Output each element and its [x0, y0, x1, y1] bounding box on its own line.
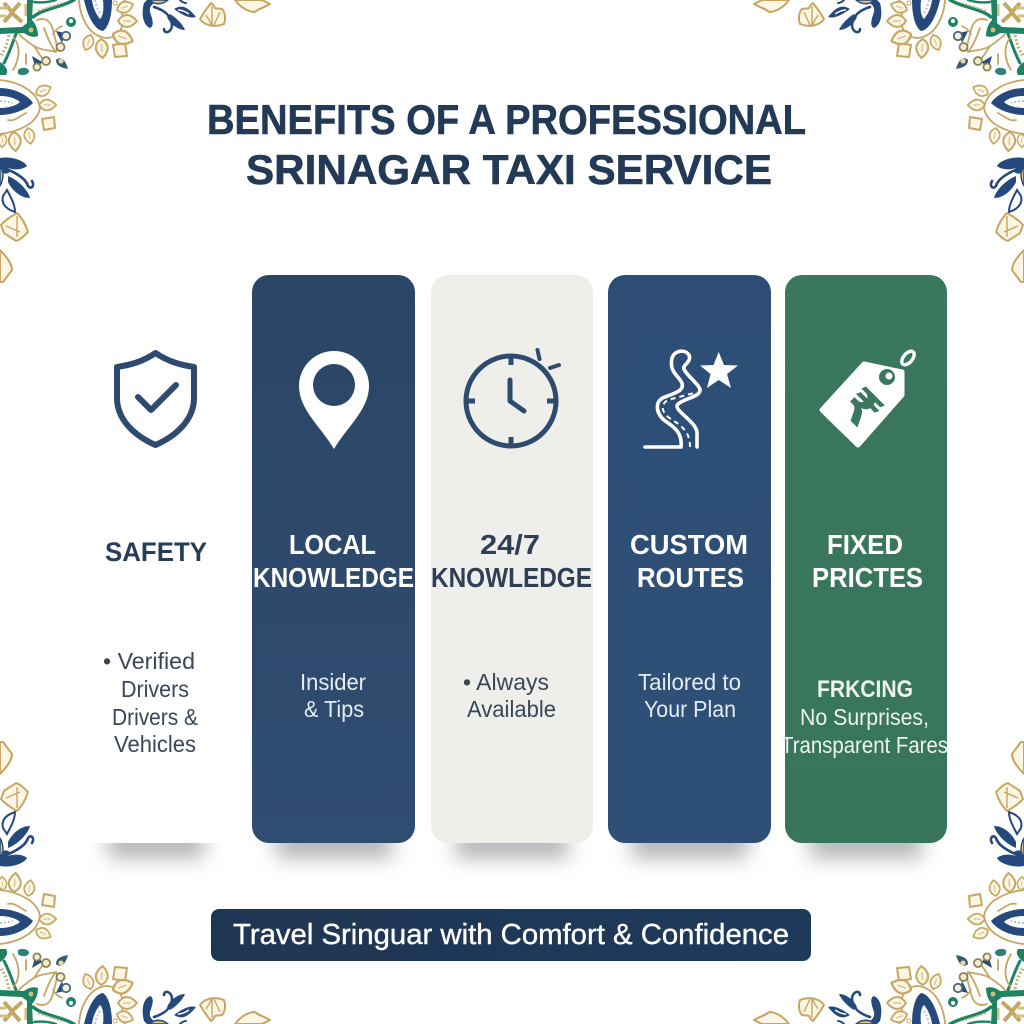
title — [207, 96, 806, 193]
panel: 24/7 knowledge — [431, 275, 593, 843]
text: local knowledge details: & Tips — [304, 696, 364, 722]
text: fixed prices details: FRKCING — [817, 676, 913, 703]
ornament: bottom-right corner — [754, 742, 1024, 1024]
text: custom routes details — [638, 669, 741, 722]
heading: local knowledge: LOCAL — [289, 529, 376, 560]
icon: location pin — [299, 351, 369, 449]
text: 24/7 details: • Always — [463, 669, 549, 695]
card shadows — [108, 830, 922, 858]
ornament: bottom-left corner — [0, 742, 270, 1024]
heading: custom routes: CUSTOM — [630, 529, 748, 560]
text: safety details — [103, 648, 198, 757]
icon: rupee price tag: ₹ — [830, 377, 893, 440]
icon: shield with check — [117, 353, 194, 445]
text: custom routes details: Your Plan — [644, 696, 736, 722]
heading: local knowledge — [253, 529, 414, 593]
text: safety details: Vehicles — [114, 731, 196, 757]
heading: fixed prices: FIXED — [827, 529, 903, 560]
text: safety details: Drivers & — [112, 704, 198, 730]
icon: clock — [466, 350, 559, 446]
text: local knowledge details — [300, 669, 366, 722]
text: safety details: Drivers — [121, 676, 189, 702]
panel: local knowledge — [252, 275, 415, 843]
ornament: top-left corner — [0, 0, 270, 282]
text: fixed prices details: No Surprises, — [800, 704, 929, 730]
heading: 24/7 knowledge — [431, 529, 592, 593]
heading: fixed prices — [812, 529, 923, 593]
title: BENEFITS OF A PROFESSIONAL — [207, 96, 806, 143]
icon: rupee price tag — [822, 349, 917, 445]
ornament: top-right corner — [754, 0, 1024, 282]
heading: 24/7 knowledge: KNOWLEDGE — [431, 562, 592, 593]
text: 24/7 details: Available — [467, 696, 556, 722]
text: local knowledge details: Insider — [300, 669, 366, 695]
panel: safety — [84, 275, 236, 843]
banner: tagline: Travel Sringuar with Comfort & Confidence — [233, 919, 789, 951]
text: custom routes details: Tailored to — [638, 669, 741, 695]
heading: local knowledge: KNOWLEDGE — [253, 562, 414, 593]
heading: 24/7 knowledge: 24/7 — [480, 529, 540, 560]
panel: fixed prices — [781, 275, 948, 843]
text: fixed prices details — [781, 676, 948, 758]
title: SRINAGAR TAXI SERVICE — [246, 146, 772, 193]
text: 24/7 details — [463, 669, 556, 722]
heading: fixed prices: PRICTES — [812, 562, 923, 593]
icon: winding road with star — [645, 351, 738, 447]
banner: tagline — [211, 909, 811, 961]
heading: custom routes — [630, 529, 748, 593]
text: fixed prices details: Transparent Fares — [781, 732, 948, 758]
text: safety details: • Verified — [103, 648, 195, 674]
heading: custom routes: ROUTES — [637, 562, 744, 593]
panel: custom routes — [608, 275, 771, 843]
heading: safety: SAFETY — [105, 537, 207, 567]
